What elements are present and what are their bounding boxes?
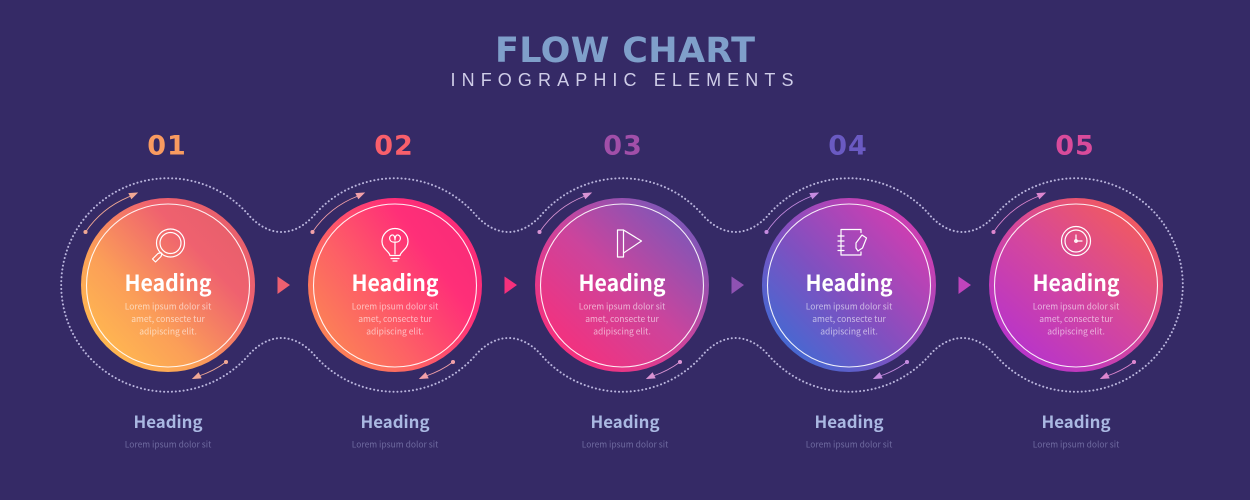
dotted flow outline — [61, 178, 1183, 392]
body text 03: amet, consecte tur — [585, 313, 659, 325]
bottom label 05: Lorem ipsum dolor sit — [1033, 438, 1120, 450]
step 01 — [81, 130, 255, 450]
body text 04 — [806, 300, 893, 338]
bottom label 03: Lorem ipsum dolor sit — [582, 438, 669, 450]
bottom label 01: Heading — [134, 409, 203, 433]
arrows 01 — [84, 193, 228, 378]
body text 03 — [579, 300, 666, 338]
arrows 04 — [765, 193, 909, 378]
title: FLOW CHART — [495, 31, 755, 71]
bottom label 02 — [352, 409, 439, 450]
bottom label 03 — [582, 409, 669, 450]
body text 05 — [1033, 300, 1120, 338]
bottom label 04: Heading — [814, 409, 884, 433]
connector arrow 4 — [958, 276, 971, 294]
step 02 — [308, 130, 482, 450]
arrows 05 — [992, 193, 1136, 378]
bottom label 05: Heading — [1042, 409, 1111, 433]
body text 04: adipiscing elit. — [820, 326, 878, 338]
heading 04: Heading — [806, 266, 893, 298]
number 05: 05 — [1055, 130, 1095, 162]
circle 05 — [989, 198, 1163, 372]
body text 02: amet, consecte tur — [358, 313, 432, 325]
circle 04 — [762, 198, 936, 372]
body text 02: adipiscing elit. — [366, 326, 424, 338]
number 03: 03 — [603, 130, 643, 162]
heading 01: Heading — [124, 266, 212, 298]
body text 04: Lorem ipsum dolor sit — [806, 300, 893, 312]
body text 01: Lorem ipsum dolor sit — [125, 300, 212, 312]
number 04: 04 — [828, 130, 868, 162]
body text 05: Lorem ipsum dolor sit — [1033, 300, 1120, 312]
body text 03: Lorem ipsum dolor sit — [579, 300, 666, 312]
step 05 — [989, 130, 1163, 450]
number 02: 02 — [374, 130, 414, 162]
body text 05: amet, consecte tur — [1039, 313, 1113, 325]
circle 02 — [308, 198, 482, 372]
bottom label 04 — [806, 409, 893, 450]
connector arrow 2 — [504, 276, 517, 294]
body text 05: adipiscing elit. — [1047, 326, 1105, 338]
circle 01 — [81, 198, 255, 372]
arrows 02 — [311, 193, 455, 378]
bottom label 05 — [1033, 409, 1120, 450]
body text 02 — [352, 300, 439, 338]
subtitle: INFOGRAPHIC ELEMENTS — [450, 70, 794, 90]
icon: magnifier — [152, 229, 184, 262]
body text 01 — [125, 300, 212, 338]
step 03 — [535, 130, 709, 450]
bottom label 02: Heading — [360, 409, 430, 433]
connector arrow 1 — [278, 276, 290, 294]
icon: flag — [618, 230, 642, 257]
bottom label 02: Lorem ipsum dolor sit — [352, 438, 439, 450]
circle 03 — [535, 198, 709, 372]
heading 05: Heading — [1032, 266, 1120, 298]
body text 01: adipiscing elit. — [139, 326, 197, 338]
icon: clock — [1062, 226, 1090, 256]
step 04 — [762, 130, 936, 450]
icon: notebook and pen — [838, 230, 866, 255]
bottom label 01 — [125, 409, 212, 450]
number 01: 01 — [147, 130, 187, 162]
icon: light bulb — [382, 228, 408, 261]
title — [450, 31, 794, 90]
body text 03: adipiscing elit. — [593, 326, 651, 338]
heading 03: Heading — [578, 266, 666, 298]
heading 02: Heading — [352, 266, 439, 298]
arrows 03 — [538, 193, 682, 378]
bottom label 03: Heading — [590, 409, 660, 433]
body text 02: Lorem ipsum dolor sit — [352, 300, 439, 312]
bottom label 01: Lorem ipsum dolor sit — [125, 438, 212, 450]
connector arrow 3 — [732, 276, 744, 294]
body text 01: amet, consecte tur — [131, 313, 205, 325]
bottom label 04: Lorem ipsum dolor sit — [806, 438, 893, 450]
body text 04: amet, consecte tur — [812, 313, 886, 325]
